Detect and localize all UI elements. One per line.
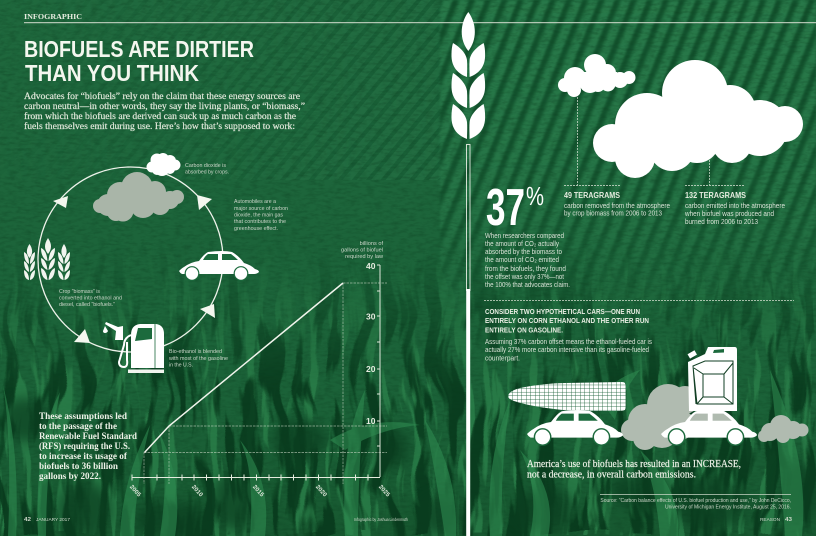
heading: two hypothetical cars	[485, 307, 649, 334]
footer left: Infographic by Joshua Lindenmuth	[354, 517, 409, 522]
body: carbon offset: counterpart.	[485, 354, 520, 362]
icon: wheat stalks	[24, 238, 70, 280]
icon: car	[179, 251, 259, 281]
axis title: required by law	[345, 254, 384, 260]
label: carbon dioxide absorbed: absorbed by crops.	[185, 170, 229, 176]
cycle ring	[38, 167, 223, 352]
stat: 49 teragrams: 49 TERAGRAMS	[564, 191, 621, 200]
icon: corn cob	[508, 382, 626, 411]
footer left: 42	[24, 517, 31, 523]
label: carbon dioxide absorbed: Carbon dioxide is	[185, 163, 226, 169]
icon: ethanol car	[527, 410, 623, 446]
stat: 37 percent: %	[526, 181, 544, 211]
stat explanation: the amount of CO₂ actually	[485, 239, 559, 248]
x axis labels: 2010	[190, 484, 204, 499]
stat: 49 teragrams	[564, 191, 670, 218]
y axis labels	[366, 261, 376, 426]
icon: small white cloud	[558, 54, 636, 97]
conclusion	[527, 459, 741, 480]
stat explanation: the amount of CO₂ emitted	[485, 255, 559, 264]
label: crop biomass: diesel, called “biofuels.”	[59, 302, 115, 308]
heading: two hypothetical cars: ENTIRELY ON GASOLINE.	[485, 326, 563, 334]
section divider	[484, 300, 794, 302]
y axis labels: 10	[366, 416, 376, 426]
intro paragraph	[24, 91, 305, 132]
arrowheads	[53, 195, 215, 343]
body: carbon offset: Assuming 37% carbon offset means the ethanol-fueled car is	[485, 337, 652, 346]
stat explanation: When researchers compared	[485, 231, 564, 240]
RFS paragraph: (RFS) requiring the U.S.	[39, 441, 130, 452]
RFS paragraph: to increase its usage of	[39, 451, 128, 462]
stat explanation: the offset was only 37%—not	[485, 272, 564, 281]
heading: two hypothetical cars: ENTIRELY ON CORN ETHANOL AND THE OTHER RUN	[485, 316, 649, 325]
x axis labels: 2025	[377, 484, 391, 499]
body: carbon offset	[485, 337, 652, 362]
stat explanation	[485, 231, 570, 289]
illustration: two cars	[508, 347, 808, 450]
heading: two hypothetical cars: CONSIDER TWO HYPOTHETICAL CARS—ONE RUN	[485, 307, 640, 316]
label: automobiles: dioxide, the main gas	[234, 212, 283, 218]
footer right	[760, 517, 792, 523]
label: bio-ethanol	[168, 349, 228, 368]
label: automobiles	[234, 199, 288, 232]
icon: fuel pump	[103, 322, 164, 373]
icon: gasoline car	[661, 410, 757, 446]
label: bio-ethanol: in the U.S.	[169, 362, 193, 368]
header rule	[24, 22, 816, 23]
intro paragraph: fuels themselves emit during use. Here’s how that’s supposed to work:	[24, 121, 295, 132]
y axis	[377, 265, 380, 477]
title	[24, 36, 254, 86]
guide lines	[144, 283, 387, 484]
footer left: JANUARY 2017	[36, 517, 70, 523]
stem outline	[466, 144, 470, 290]
x axis labels: 2020	[314, 484, 328, 499]
source note: University of Michigan Energy Institute, August 25, 2016.	[665, 504, 791, 510]
label: carbon dioxide absorbed	[185, 163, 229, 176]
stat explanation: absorbed by the biomass to	[485, 247, 562, 256]
stem solid	[466, 289, 470, 536]
data line	[144, 283, 343, 452]
icon: large white cloud	[593, 60, 803, 178]
icon: large wheat stalk	[451, 12, 485, 536]
intro paragraph: from which the biofuels are derived can suck up as much carbon as the	[24, 111, 296, 122]
RFS paragraph: These assumptions led	[39, 411, 128, 422]
footer right: REASON	[760, 517, 781, 523]
RFS paragraph: gallons by 2022.	[39, 471, 101, 482]
RFS paragraph	[39, 411, 137, 482]
label: crop biomass: Crop “biomass” is	[59, 289, 100, 295]
axis title	[341, 241, 384, 260]
footer left	[24, 517, 409, 523]
stat: 49 teragrams: by crop biomass from 2006 to 2013	[564, 208, 662, 218]
y axis labels: 30	[366, 312, 376, 322]
stat: 132 teragrams: carbon emitted into the atmosphere	[685, 201, 785, 210]
label: automobiles: major source of carbon	[234, 206, 288, 212]
label: automobiles: Automobiles are a	[234, 199, 277, 205]
intro paragraph: Advocates for “biofuels” rely on the claim that these energy sources are	[24, 91, 300, 102]
source note: Source: “Carbon balance effects of U.S. biofuel production and use,” by John DeCicco,	[600, 498, 791, 504]
footer right: 43	[785, 517, 792, 523]
source note	[600, 494, 791, 510]
stat explanation: the 100% that advocates claim.	[485, 280, 570, 289]
intro paragraph: carbon neutral—in other words, they say the living plants, or “biomass,”	[24, 102, 305, 112]
RFS paragraph: to the passage of the	[39, 421, 118, 432]
icon: jerry can	[688, 347, 737, 411]
stat: 132 teragrams	[684, 191, 785, 226]
label: crop biomass: converted into ethanol and	[59, 296, 122, 302]
conclusion: not a decrease, in overall carbon emissions.	[527, 470, 696, 480]
x axis labels: 2015	[251, 484, 265, 499]
stat: 132 teragrams: burned from 2006 to 2013	[685, 217, 758, 226]
y axis labels: 20	[366, 364, 376, 374]
axis title: billions of	[360, 241, 383, 247]
label: bio-ethanol: Bio-ethanol is blended	[169, 349, 222, 355]
conclusion: America’s use of biofuels has resulted in an INCREASE,	[527, 459, 741, 470]
RFS paragraph: biofuels to 36 billion	[39, 461, 119, 472]
carbon cycle diagram	[24, 153, 288, 373]
body: carbon offset: actually 27% more carbon intensive than its gasoline-fueled	[485, 345, 649, 354]
grey exhaust cloud 1	[621, 384, 699, 450]
stat: 132 teragrams: 132 TERAGRAMS	[685, 191, 747, 200]
stat: 49 teragrams: carbon removed from the atmosphere	[564, 201, 670, 210]
label: automobiles: that contributes to the	[234, 219, 286, 225]
y axis labels: 40	[366, 261, 376, 271]
x axis labels	[128, 484, 391, 499]
icon: white cloud	[146, 153, 180, 176]
axis title: gallons of biofuel	[341, 248, 383, 254]
label: bio-ethanol: with most of the gasoline	[168, 356, 228, 362]
x axis	[132, 474, 380, 480]
line chart: billions of gallons of biofuel required by law	[128, 241, 391, 499]
label: crop biomass	[59, 289, 122, 308]
grey exhaust cloud 2	[758, 415, 808, 443]
icon: grey carbon cloud	[93, 172, 184, 222]
RFS paragraph: Renewable Fuel Standard	[39, 431, 137, 442]
stat: 132 teragrams: when biofuel was produced and	[684, 209, 774, 218]
title: THAN YOU THINK	[25, 60, 199, 86]
stat explanation: from the biofuels, they found	[485, 264, 566, 273]
label: automobiles: greenhouse effect.	[234, 226, 278, 232]
title: BIOFUELS ARE DIRTIER	[24, 36, 254, 62]
leader lines	[564, 97, 744, 186]
stat: 37 percent: 37	[486, 179, 525, 237]
x axis labels: 2005	[128, 484, 142, 499]
header: section label: INFOGRAPHIC	[24, 12, 82, 21]
